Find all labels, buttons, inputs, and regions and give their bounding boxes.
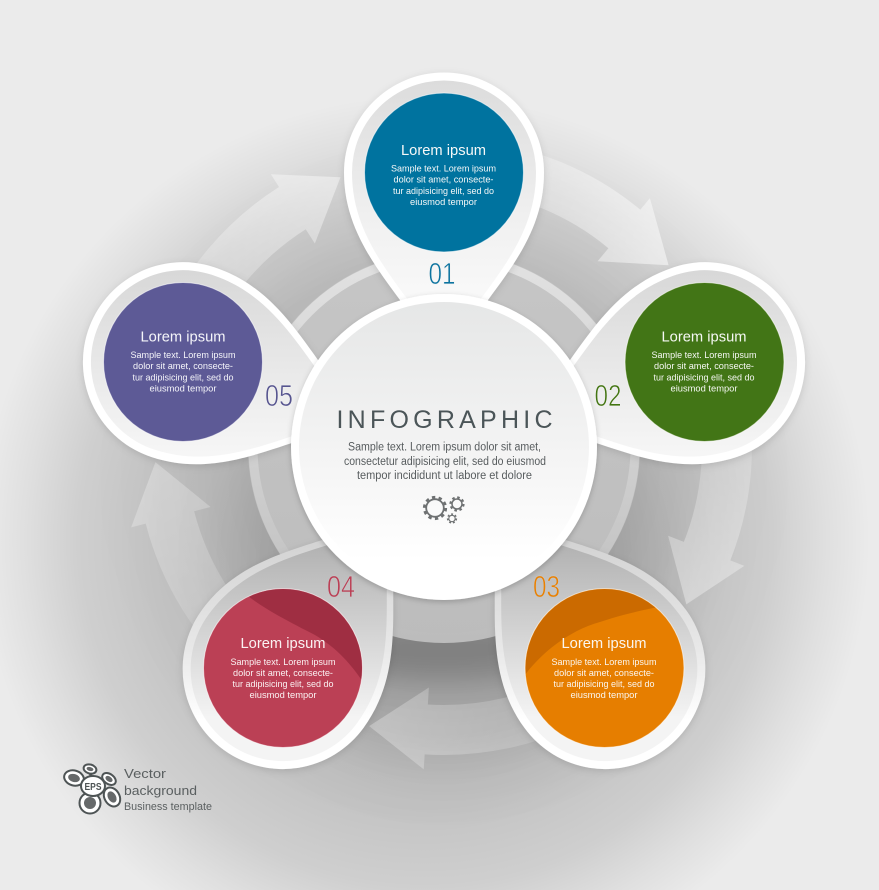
panel: step 04: [182, 540, 394, 772]
logo text: background: [124, 783, 197, 798]
number 02: 02: [594, 378, 622, 413]
text: step 04: dolor sit amet, consecte-: [233, 668, 333, 679]
text: step 05: [130, 330, 236, 394]
heading: INFOGRAPHIC: [336, 406, 552, 434]
text: step 05: dolor sit amet, consecte-: [133, 361, 233, 372]
text: step 02: tur adipisicing elit, sed do: [654, 373, 754, 384]
logo text: Vector: [124, 766, 167, 781]
text: step 05: Sample text. Lorem ipsum: [130, 350, 236, 361]
text: step 04: [230, 636, 336, 701]
text: step 03: Sample text. Lorem ipsum: [552, 657, 657, 668]
text: step 04: eiusmod tempor: [250, 690, 316, 701]
inner ring disc: [248, 251, 640, 643]
logo text: Business template: [124, 801, 212, 813]
text: step 04: Sample text. Lorem ipsum: [230, 657, 336, 668]
cycle arrows: [82, 139, 805, 827]
text: step 01: tur adipisicing elit, sed do: [393, 186, 494, 197]
text: step 03: Lorem ipsum: [562, 636, 646, 652]
text: step 02: Sample text. Lorem ipsum: [652, 350, 757, 361]
text: step 05: tur adipisicing elit, sed do: [132, 373, 234, 384]
number 01: 01: [428, 256, 456, 291]
panel: center circle: [291, 294, 597, 600]
text: step 01: eiusmod tempor: [410, 197, 477, 208]
text: step 01: [391, 143, 496, 208]
number 05: 05: [265, 378, 293, 413]
text: step 03: [552, 636, 657, 701]
panel: step 05: [57, 236, 354, 503]
number 04: 04: [327, 569, 355, 604]
panel: step 02: [534, 236, 831, 503]
number 03: 03: [533, 569, 560, 604]
center text block: consectetur adipisicing elit, sed do eiusmod: [344, 456, 546, 468]
logo text: [124, 766, 212, 813]
center text block: [344, 442, 546, 482]
text: step 03: tur adipisicing elit, sed do: [554, 679, 654, 690]
logo: EPS badge: EPS: [84, 782, 102, 793]
text: step 01: dolor sit amet, consecte-: [394, 174, 494, 186]
text: step 04: tur adipisicing elit, sed do: [232, 679, 334, 690]
text: step 05: Lorem ipsum: [140, 330, 226, 346]
text: step 05: eiusmod tempor: [150, 384, 216, 394]
center text block: tempor incididunt ut labore et dolore: [357, 470, 532, 482]
text: step 02: Lorem ipsum: [662, 330, 746, 346]
icon: gears: [424, 497, 464, 523]
center text block: Sample text. Lorem ipsum dolor sit amet,: [348, 442, 541, 454]
text: step 02: [652, 330, 757, 394]
text: step 01: Lorem ipsum: [401, 143, 486, 159]
text: step 03: dolor sit amet, consecte-: [554, 668, 654, 679]
panel: step 01: [344, 72, 544, 320]
logo: EPS badge: [62, 763, 123, 814]
text: step 04: Lorem ipsum: [240, 636, 326, 652]
text: step 02: eiusmod tempor: [670, 384, 738, 394]
text: step 02: dolor sit amet, consecte-: [654, 361, 754, 372]
background: [12, 134, 838, 890]
panel: step 03: [494, 540, 707, 772]
text: step 03: eiusmod tempor: [570, 690, 638, 701]
text: step 01: Sample text. Lorem ipsum: [391, 164, 496, 174]
